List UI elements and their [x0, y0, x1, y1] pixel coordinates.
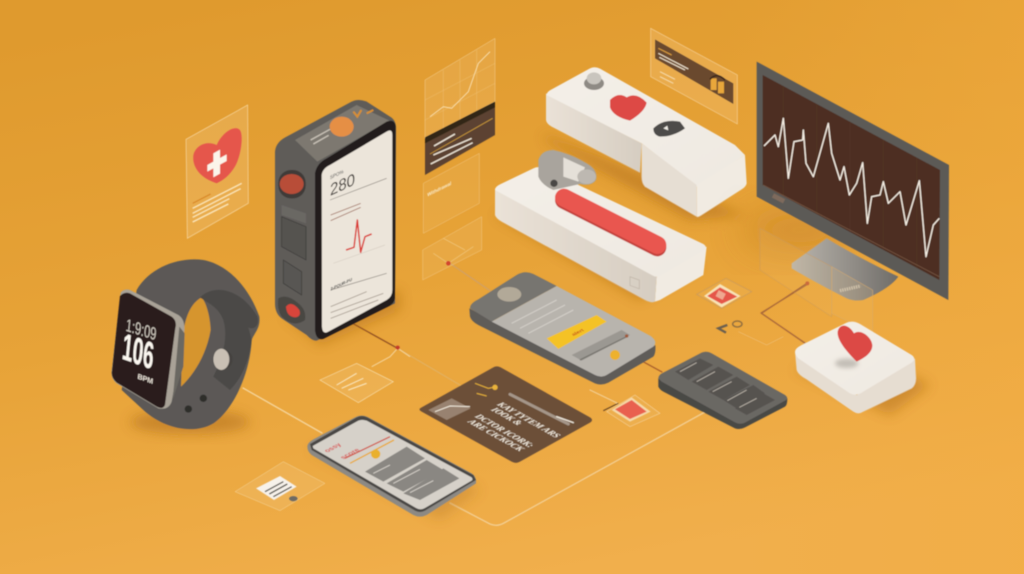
- watch screen: BPM: [137, 372, 153, 386]
- icon: 3D heart: [838, 326, 872, 362]
- band holes: [185, 395, 207, 413]
- phone screen bezel: [315, 121, 396, 339]
- watch case: [112, 290, 184, 409]
- mark: [630, 277, 639, 289]
- inner strap: [200, 290, 258, 390]
- monitor screen: [763, 75, 940, 280]
- card slider: [510, 394, 573, 424]
- red slider: [564, 198, 657, 247]
- watch band: [122, 259, 260, 429]
- monitor frame: [757, 62, 949, 300]
- phone screen: ossy: [322, 442, 344, 454]
- tablet edge: [469, 308, 655, 385]
- panel: brown card: [419, 366, 592, 463]
- small glass tile with heart outline: [320, 346, 410, 403]
- phone shadow: [285, 290, 400, 345]
- panel: heart card: [186, 105, 248, 238]
- band button: [213, 349, 233, 370]
- card text: KAY TYTEM ARS: [494, 400, 563, 439]
- heart block shadow: [795, 350, 930, 415]
- watch shadow: [130, 410, 250, 434]
- phone screen: score: [338, 447, 362, 460]
- device: upper white block: [546, 67, 747, 217]
- sensor device: [538, 150, 596, 190]
- device: lower white block: [495, 150, 707, 302]
- end block front: [642, 143, 697, 217]
- grey end: [470, 272, 557, 322]
- panel: dark stats: [425, 102, 495, 175]
- artwork: [112, 28, 949, 525]
- slider: [572, 330, 630, 361]
- icon: red heart button: [610, 95, 647, 121]
- icon: red chip tile top: [697, 278, 752, 308]
- phone screen: 2-POUR-PU: [331, 277, 352, 292]
- phone casing: [307, 416, 476, 517]
- stone button: [497, 287, 521, 302]
- dial: [653, 121, 685, 137]
- card text lines: [193, 183, 242, 222]
- chart: heartbeat line: [764, 118, 939, 257]
- yellow alert: [547, 315, 607, 349]
- card text: ARE CICKOCK: [465, 418, 528, 453]
- connector lines: [243, 262, 808, 525]
- panel: glass note: Withdrawal: [427, 180, 452, 199]
- device: small smartphone: [307, 416, 476, 517]
- device: dark data tablet: [658, 352, 787, 429]
- knob: [584, 72, 604, 90]
- glass charts column: [423, 38, 495, 280]
- phone screen: [322, 131, 392, 333]
- phone shadow: [310, 430, 480, 520]
- band opening: [181, 297, 211, 387]
- device: tall health phone: [275, 100, 396, 341]
- data rows: [675, 358, 775, 415]
- left face: [546, 93, 642, 173]
- panel: line chart glass: [425, 38, 495, 138]
- chart: phone ECG: [346, 220, 372, 252]
- front face: [495, 188, 657, 302]
- dark bezel: [310, 416, 476, 512]
- device: white heart block: [795, 322, 916, 413]
- icon: back arrow and ring: [718, 321, 783, 345]
- list rows: [365, 447, 459, 500]
- watch screen: [112, 293, 176, 408]
- watch screen: 106: [121, 325, 156, 377]
- lower block shadow: [495, 200, 700, 300]
- phone top face: [295, 105, 389, 162]
- phone screen: 280: [330, 169, 355, 200]
- light screen: [492, 286, 655, 377]
- top face: [495, 167, 706, 277]
- card icon: [475, 383, 497, 396]
- watch screen: 1:9:09: [125, 315, 157, 344]
- top face: [547, 67, 745, 187]
- card text: [465, 400, 563, 453]
- card text: IOOK &: [488, 406, 525, 427]
- glass frames near monitor: [760, 228, 873, 343]
- side buttons: [278, 170, 306, 323]
- device: monitor: [757, 62, 949, 301]
- monitor shadow: [740, 205, 860, 255]
- card text: DCTOR ICORK:: [472, 412, 537, 449]
- icon: heart with cross: [193, 128, 242, 183]
- device: grey tablet: [469, 272, 655, 385]
- phone screen: [313, 420, 472, 509]
- phone screen: SPO%: [330, 169, 344, 181]
- icon: glass tile with menu: [235, 462, 325, 511]
- yellow alert: alert: [571, 328, 586, 337]
- end block side: [697, 155, 747, 217]
- icon: red chip tile lower: [603, 395, 660, 427]
- phone body: [275, 100, 396, 341]
- monitor stand: [792, 238, 898, 301]
- panel: glass note: [423, 153, 479, 233]
- panel: glass sensor: [423, 217, 482, 280]
- upper block shadow: [545, 135, 745, 220]
- side face: [655, 247, 707, 302]
- card chart tile: [428, 398, 471, 420]
- screen text lines: [512, 300, 573, 333]
- panel: top right glass note: [651, 28, 737, 124]
- device: smartwatch: [112, 259, 260, 429]
